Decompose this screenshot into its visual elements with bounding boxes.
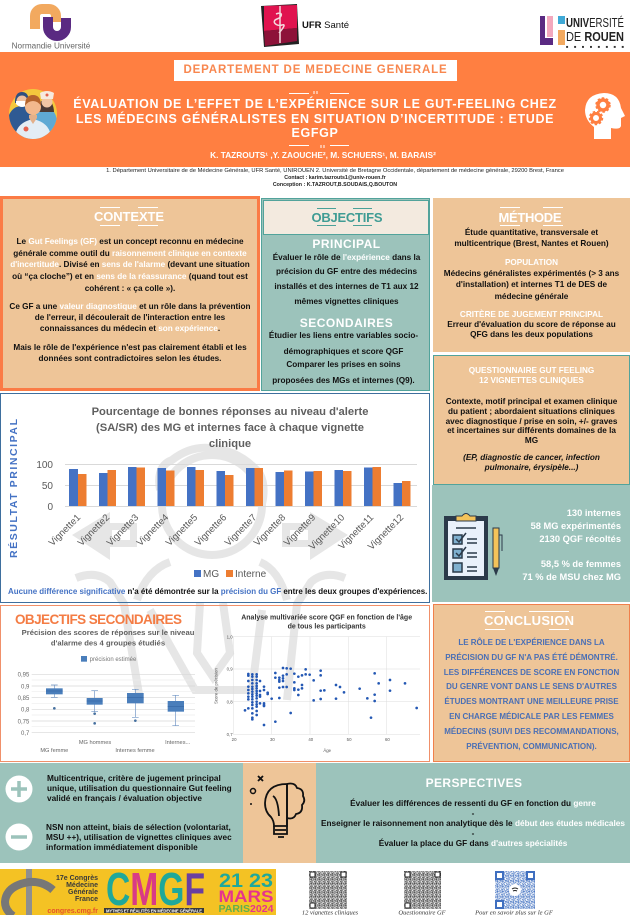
- logo: UFR Santé: [261, 4, 349, 47]
- bar chart: bonnes réponses: clinique: [209, 438, 251, 450]
- logo: Université de Rouen: [540, 15, 625, 49]
- authors: K. TAZROUTS¹ ,Y. ZAOUCHE², M. SCHUERS¹, M. BARAIS²: [210, 150, 436, 160]
- text: chiffres clés: [522, 508, 621, 582]
- text: contexte body: où “ça cloche”) et en sens de la réassurance (quand tout est: [12, 272, 248, 281]
- banner: congrès CMGF: [0, 869, 276, 915]
- text: méthode body: d'installation) et internes T1 de DES de: [456, 280, 607, 289]
- logo: Normandie Université: Normandie Université: [12, 42, 91, 50]
- bar chart: bonnes réponses: Vignette1: [47, 512, 83, 549]
- text: méthode body: Étude quantitative, transversale et: [465, 228, 598, 237]
- text: objectif principal: installés et des internes de T1 aux 12: [274, 282, 419, 291]
- text: perspectives: Enseigner le raisonnement non analytique dès le début des études médicales: [321, 819, 625, 828]
- text: chiffres clés: 130 internes: [567, 508, 621, 518]
- text: conclusion: DU GENRE VONT DANS LE SENS D'AUTRES: [446, 682, 617, 691]
- text: forces: validé en français / évaluation objective: [47, 794, 202, 803]
- text: questionnaire: Contexte, motif principal et examen clinique: [446, 397, 617, 406]
- caption: résultat: Aucune différence significative n'a été démontrée sur la précision du GF entre les deux groupes d'expériences.: [8, 587, 427, 596]
- text: méthode body: POPULATION: [505, 258, 558, 267]
- text: questionnaire: du patient ; abordaient situations cliniques: [448, 407, 615, 416]
- scatter plot: score QGF selon l'âge: de tous les participants: [288, 624, 366, 631]
- text: méthode body: [444, 228, 619, 338]
- heading: perspectives: PERSPECTIVES: [426, 776, 522, 790]
- box plot: précision par groupe: MG hommes: [79, 740, 111, 746]
- banner: congrès CMGF: PARIS2024: [218, 904, 274, 915]
- text: questionnaire: et incertaines sur différents domaines de la: [447, 426, 616, 435]
- text: méthode body: médecine générale: [495, 292, 568, 301]
- text: contexte body: générale comme outil du raisonnement clinique en contexte: [13, 249, 247, 258]
- text: méthode body: multicentrique (Brest, Nantes et Rouen): [454, 239, 609, 248]
- scatter plot: score QGF selon l'âge: Âge: [323, 748, 332, 753]
- affiliations: [106, 168, 564, 188]
- text: objectifs secondaires: [269, 330, 418, 384]
- text: conclusion: EN CHARGE MÉDICALE PAR LES FEMMES: [449, 712, 614, 721]
- scatter plot: score QGF selon l'âge: 0,8: [227, 699, 233, 704]
- text: contexte body: Mais le rôle de l'expérience n'est pas clairement établi et les: [13, 343, 247, 352]
- text: contexte body: Le Gut Feelings (GF) est un concept reconnu en médecine: [16, 237, 244, 246]
- title: LES MÉDECINS GÉNÉRALISTES EN SITUATION D’INCERTITUDE : ETUDE: [76, 112, 554, 126]
- affiliations: Contact : karim.tazrouts1@univ-rouen.fr: [284, 174, 386, 180]
- icon: clipboard checklist: [444, 513, 502, 580]
- panel: forces et limites: [0, 763, 243, 863]
- banner: congrès CMGF: 21 23: [219, 871, 273, 892]
- panel: perspectives: [316, 763, 630, 863]
- bar chart: bonnes réponses: Vignette7: [223, 512, 259, 549]
- text: chiffres clés: 2130 QGF récoltés: [539, 534, 621, 544]
- department label: [174, 60, 457, 81]
- text: contexte body: cohérent : « ça colle »).: [85, 284, 175, 293]
- header banner: [0, 52, 630, 167]
- text: objectifs secondaires: Étudier les liens entre variables socio-: [269, 331, 418, 340]
- text: contexte body: de l'erreur, il découlerait de l'interaction entre les: [35, 313, 225, 322]
- heading: contexte: CONTEXTE: [94, 209, 164, 224]
- box plot: précision par groupe: 0,9: [21, 684, 30, 690]
- panel: conclusion: [433, 604, 630, 762]
- text: questionnaire: MG: [525, 436, 538, 445]
- text: perspectives: Évaluer les différences de ressenti du GF en fonction du genre: [350, 799, 596, 808]
- text: contexte body: connaissances du médecin et son expérience.: [40, 324, 220, 333]
- panel: objectifs: [261, 198, 430, 391]
- bar chart: bonnes réponses: 50: [42, 481, 53, 492]
- text: conclusion: [444, 638, 619, 751]
- box plot: précision par groupe: 0,85: [18, 696, 30, 702]
- title: [73, 96, 557, 140]
- affiliations: Conception : K.TAZROUT,B.SOUDAIS,Q.BOUTON: [273, 182, 397, 188]
- QR code: pour en savoir plus: [474, 871, 554, 915]
- title ornaments: [289, 91, 349, 148]
- text: conclusion: PRÉCISION DU GF N'A PAS ÉTÉ DÉMONTRÉ.: [445, 653, 618, 662]
- logo: UFR Santé: UFR Santé: [302, 20, 349, 31]
- text: conclusion: PRÉVENTION, COMMUNICATION).: [466, 742, 597, 751]
- text: contexte body: d'incertitude. Divisé en sens de l'alarme (devant une situation: [10, 260, 250, 269]
- bar chart: bonnes réponses: MG: [203, 569, 219, 580]
- text: objectif principal: [273, 252, 420, 306]
- scatter plot: score QGF selon l'âge: 60: [385, 737, 390, 742]
- bar chart: bonnes réponses: 100: [36, 460, 53, 471]
- text: questionnaire: 12 VIGNETTES CLINIQUES: [479, 376, 584, 385]
- box plot: précision par groupe: Internes femme: [115, 748, 155, 754]
- scatter plot: score QGF selon l'âge: [214, 614, 420, 753]
- text: chiffres clés: 58,5 % de femmes: [541, 559, 621, 569]
- bar chart: bonnes réponses: (SA/SR) des MG et internes face à chaque vignette: [96, 422, 364, 434]
- banner: congrès CMGF: 17e Congrès: [56, 875, 98, 882]
- text: objectifs secondaires: démographiques et score QGF: [284, 346, 403, 356]
- text: perspectives: -: [472, 829, 474, 838]
- banner: congrès CMGF: Médecine: [66, 882, 98, 889]
- text: perspectives: -: [472, 809, 474, 818]
- panel: chiffres clés: [432, 485, 630, 602]
- text: questionnaire: avec diagnostique / prise en soin, +/- graves: [446, 416, 617, 426]
- heading: méthode: MÉTHODE: [498, 210, 562, 225]
- bar chart: bonnes réponses: Interne: [235, 569, 267, 580]
- text: conclusion: LE RÔLE DE L'EXPÉRIENCE DANS LA: [458, 638, 605, 647]
- box plot: précision par groupe: 0,95: [18, 673, 30, 679]
- affiliations: 1. Département Universitaire de de Médecine Générale, UFR Santé, UNIROUEN 2. Université de Bretagne Occidentale, département de médecine générale, 29200 Brest, France: [106, 168, 564, 174]
- QR code: 12 vignettes cliniques: [302, 871, 359, 915]
- logo: Université de Rouen: ■ ■ ■ ■ ■ ■ ■ ■: [566, 44, 625, 49]
- bar chart: bonnes réponses: Vignette10: [307, 512, 347, 552]
- heading: secondaires: SECONDAIRES: [300, 316, 393, 330]
- box plot: précision par groupe: 0,75: [18, 719, 30, 725]
- text: forces: Multicentrique, critère de jugement principal: [47, 774, 221, 783]
- text: limites: [46, 823, 232, 852]
- panel: contexte: [0, 196, 260, 391]
- scatter plot: score QGF selon l'âge: 0,9: [227, 667, 233, 672]
- banner: congrès CMGF: MYTHES ET RÉALITÉS EN MÉDECINE GÉNÉRALE: [106, 908, 202, 914]
- text: objectif principal: mêmes vignettes cliniques: [294, 297, 399, 306]
- scatter plot: score QGF selon l'âge: 30: [270, 737, 275, 742]
- text: contexte body: données sont contradictoires selon les études.: [39, 354, 221, 363]
- bar chart: bonnes réponses: [36, 406, 417, 580]
- text: forces: [47, 774, 232, 803]
- department label: DEPARTEMENT DE MEDECINE GENERALE: [183, 64, 448, 76]
- text: conclusion: ÉTUDES MONTRANT UNE MEILLEURE PRISE: [444, 697, 619, 706]
- text: contexte body: Ce GF a une valeur diagnostique et un rôle dans la prévention: [9, 302, 251, 311]
- text: chiffres clés: 71 % de MSU chez MG: [522, 572, 621, 582]
- bar chart: bonnes réponses: Vignette3: [105, 512, 141, 549]
- text: méthode body: CRITÈRE DE JUGEMENT PRINCIPAL: [460, 310, 603, 319]
- banner: congrès CMGF: Générale: [68, 889, 98, 896]
- text: forces: unique, utilisation du questionnaire Gut feeling: [47, 784, 232, 793]
- text: conclusion: LES DIFFÉRENCES DE SCORE EN FONCTION: [444, 668, 619, 677]
- bar chart: bonnes réponses: Vignette4: [135, 512, 172, 549]
- heading: objectifs: OBJECTIFS: [312, 210, 383, 225]
- text: objectifs secondaires: Comparer les prises en soins: [286, 360, 401, 369]
- bar chart: bonnes réponses: 0: [47, 502, 53, 513]
- icon: plus: [6, 776, 32, 802]
- text: limites: NSN non atteint, biais de sélection (volontariat,: [46, 823, 231, 832]
- scatter plot: score QGF selon l'âge: 0,7: [227, 732, 233, 737]
- banner: congrès CMGF: MARS: [218, 887, 274, 906]
- text: contexte body: [9, 237, 251, 363]
- logo: Normandie Université: [12, 4, 91, 50]
- text: perspectives: [321, 798, 625, 848]
- scatter plot: score QGF selon l'âge: 50: [347, 737, 352, 742]
- icon: minus: [6, 824, 32, 850]
- text: questionnaire: QUESTIONNAIRE GUT FEELING: [469, 366, 594, 375]
- panel: icône ampoule: [243, 763, 316, 863]
- panel: méthode: [433, 198, 630, 352]
- text: chiffres clés: 58 MG expérimentés: [531, 521, 621, 531]
- box plot: précision par groupe: 0,7: [21, 731, 30, 737]
- text: perspectives: Évaluer la place du GF dans d'autres spécialités: [379, 839, 567, 848]
- bar chart: bonnes réponses: Vignette8: [252, 512, 288, 549]
- icon: doctors: [9, 89, 57, 139]
- heading: conclusion: CONCLUSION: [484, 613, 574, 628]
- scatter plot: score QGF selon l'âge: 20: [232, 737, 237, 742]
- text: méthode body: Médecins généralistes expérimentés (> 3 ans: [444, 269, 619, 278]
- panel: résultat principal: [0, 393, 430, 603]
- bar chart: bonnes réponses: Vignette12: [366, 512, 406, 552]
- box plot: précision par groupe: Internes...: [165, 740, 191, 746]
- text: questionnaire: (EP, diagnostic de cancer, infection: [463, 453, 600, 462]
- box plot: précision par groupe: 0,8: [21, 708, 30, 714]
- text: méthode body: QFG dans les deux populations: [470, 330, 593, 338]
- box plot: précision par groupe: [18, 628, 195, 754]
- bar chart: bonnes réponses: Vignette6: [193, 512, 229, 549]
- heading: objectifs: [263, 200, 429, 235]
- box plot: précision par groupe: Précision des scores de réponses sur le niveau: [22, 628, 195, 637]
- bar chart: bonnes réponses: Pourcentage de bonnes réponses au niveau d'alerte: [92, 406, 368, 418]
- panel: objectifs secondaires: [0, 605, 430, 762]
- bar chart: bonnes réponses: Vignette2: [76, 512, 112, 549]
- text: limites: MSU ++), utilisation de vignettes cliniques avec: [46, 833, 232, 842]
- logo: Université de Rouen: DE ROUEN: [566, 30, 624, 44]
- bar chart: bonnes réponses: Vignette5: [164, 512, 200, 549]
- scatter plot: score QGF selon l'âge: 40: [308, 737, 314, 742]
- box plot: précision par groupe: précision estimée: [90, 657, 137, 663]
- text: questionnaire: pulmonaire, érysipèle...): [485, 463, 578, 472]
- bar chart: bonnes réponses: Vignette9: [282, 512, 318, 549]
- bar chart: bonnes réponses: Vignette11: [337, 512, 376, 552]
- text: méthode body: Erreur d'évaluation du score de réponse au: [447, 320, 616, 329]
- box plot: précision par groupe: d'alarme des 4 groupes étudiés: [51, 638, 165, 647]
- text: conclusion: MÉDECINS (SUIVI DES RECOMMANDATIONS,: [444, 727, 619, 736]
- scatter plot: score QGF selon l'âge: Analyse multivariée score QGF en fonction de l'âge: [241, 615, 412, 622]
- scatter plot: score QGF selon l'âge: Score de précision: [214, 668, 219, 704]
- text: objectif principal: Évaluer le rôle de l'expérience dans la: [273, 253, 420, 262]
- text: objectifs secondaires: proposées des MGs et internes (Q9).: [272, 376, 415, 384]
- icon: brain bulb: [250, 775, 306, 838]
- icon: head with gears: [585, 93, 625, 139]
- text: objectif principal: précision du GF entre des médecins: [276, 267, 417, 276]
- title: EGFGP: [291, 126, 339, 140]
- heading: objectifs secondaires: OBJECTIFS SECONDAIRES: [15, 612, 182, 627]
- background watermark: doctor silhouette: [72, 444, 348, 700]
- box plot: précision par groupe: MG femme: [40, 748, 68, 754]
- panel: questionnaire: [433, 355, 630, 485]
- scatter plot: score QGF selon l'âge: 1,0: [227, 634, 233, 639]
- QR code: questionnaire GF: [398, 871, 447, 915]
- banner: congrès CMGF: France: [75, 896, 98, 903]
- text: limites: information immédiatement disponible: [46, 843, 198, 852]
- heading: principal: PRINCIPAL: [312, 237, 381, 251]
- text: questionnaire: [446, 366, 618, 472]
- banner: congrès CMGF: congres.cmg.fr: [47, 908, 98, 915]
- title: ÉVALUATION DE L’EFFET DE L’EXPÉRIENCE SUR LE GUT-FEELING CHEZ: [73, 97, 557, 111]
- heading: résultat principal (vertical): RÉSULTAT PRINCIPAL: [7, 418, 20, 558]
